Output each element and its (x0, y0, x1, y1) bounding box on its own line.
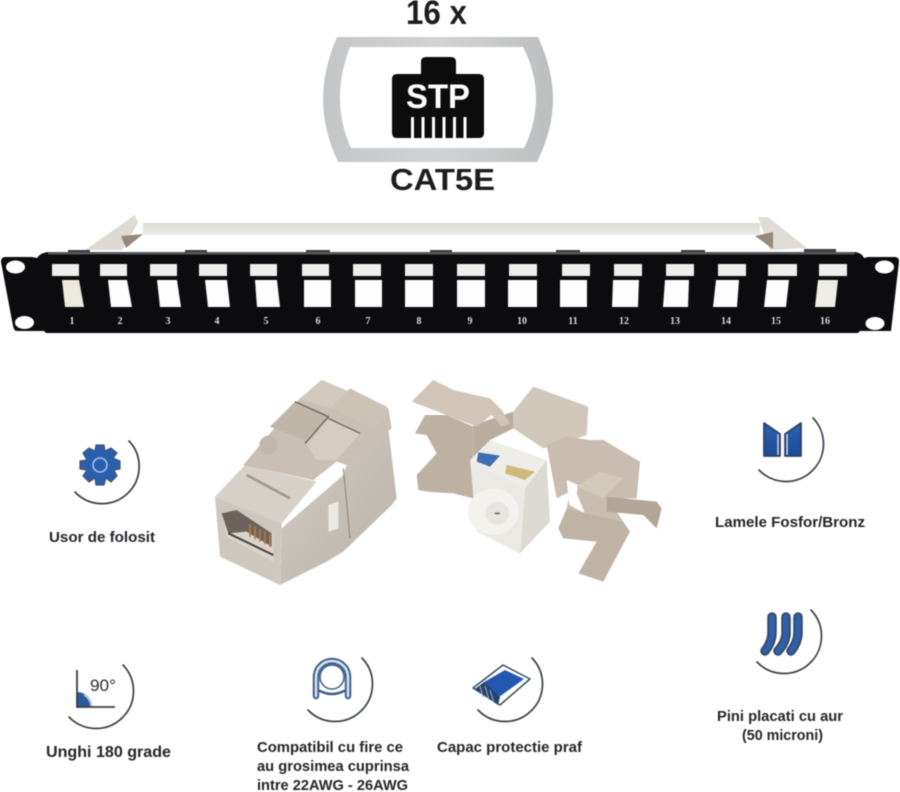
arc (69, 665, 133, 728)
label: Lamele Fosfor/Bronz (715, 514, 865, 531)
feature: Compatibil cu fire (257, 658, 410, 792)
arc (478, 658, 542, 721)
port numbers: 3 (166, 316, 170, 327)
label: Capac protectie praf (437, 739, 583, 756)
feature: Pini placati cu aur (717, 610, 843, 744)
icon: contact blades (764, 423, 801, 456)
port numbers: 1 (70, 316, 74, 327)
label: Pini placati cu aur (717, 708, 843, 725)
icon: cable loop (316, 661, 348, 696)
patch panel (1, 215, 899, 333)
icon: gold pins (765, 617, 798, 651)
icon: gear (80, 445, 120, 485)
photo: assembled keystone jack (215, 380, 397, 585)
rear bracket (68, 215, 836, 253)
port numbers: 11 (568, 316, 578, 327)
port numbers: 14 (721, 316, 731, 327)
keystone openings (62, 280, 838, 307)
label (257, 739, 410, 792)
badge frame (323, 37, 553, 162)
feature: Unghi 180 grade (46, 665, 171, 761)
port numbers: 15 (771, 316, 781, 327)
port numbers: 2 (118, 316, 122, 327)
label: Usor de folosit (49, 529, 155, 546)
rack ear holes (6, 260, 894, 330)
label: CAT5E: CAT5E (390, 162, 495, 197)
port numbers (70, 316, 830, 327)
STP jack icon (392, 57, 484, 138)
icon: 90 degree angle: 90° (90, 676, 116, 695)
arc (308, 658, 372, 721)
label: Compatibil cu fire ce (257, 739, 403, 756)
arc (75, 441, 139, 504)
label windows (52, 264, 847, 276)
port numbers: 8 (416, 316, 422, 327)
feature: Usor de folosit (49, 441, 155, 546)
port numbers: 10 (517, 316, 527, 327)
port numbers: 5 (264, 316, 268, 327)
label: au grosimea cuprinsa (257, 758, 410, 775)
label (717, 708, 843, 744)
feature: Lamele Fosfor/Bronz (715, 418, 865, 531)
port numbers: 12 (619, 316, 629, 327)
port numbers: 7 (366, 316, 370, 327)
photo: open keystone jack (412, 380, 662, 582)
port numbers: 4 (214, 316, 220, 327)
icon: dust cover (473, 665, 530, 705)
arc (757, 610, 821, 673)
port numbers: 16 (820, 316, 830, 327)
icon: STP port badge (323, 37, 553, 162)
port numbers: 6 (316, 316, 320, 327)
black faceplate (1, 252, 899, 333)
label: Unghi 180 grade (46, 744, 171, 761)
label: (50 microni) (742, 727, 823, 744)
STP jack icon: STP (406, 78, 470, 116)
port numbers: 9 (468, 316, 472, 327)
port numbers: 13 (670, 316, 680, 327)
arc (759, 418, 823, 481)
feature: Capac protectie praf (437, 658, 583, 756)
